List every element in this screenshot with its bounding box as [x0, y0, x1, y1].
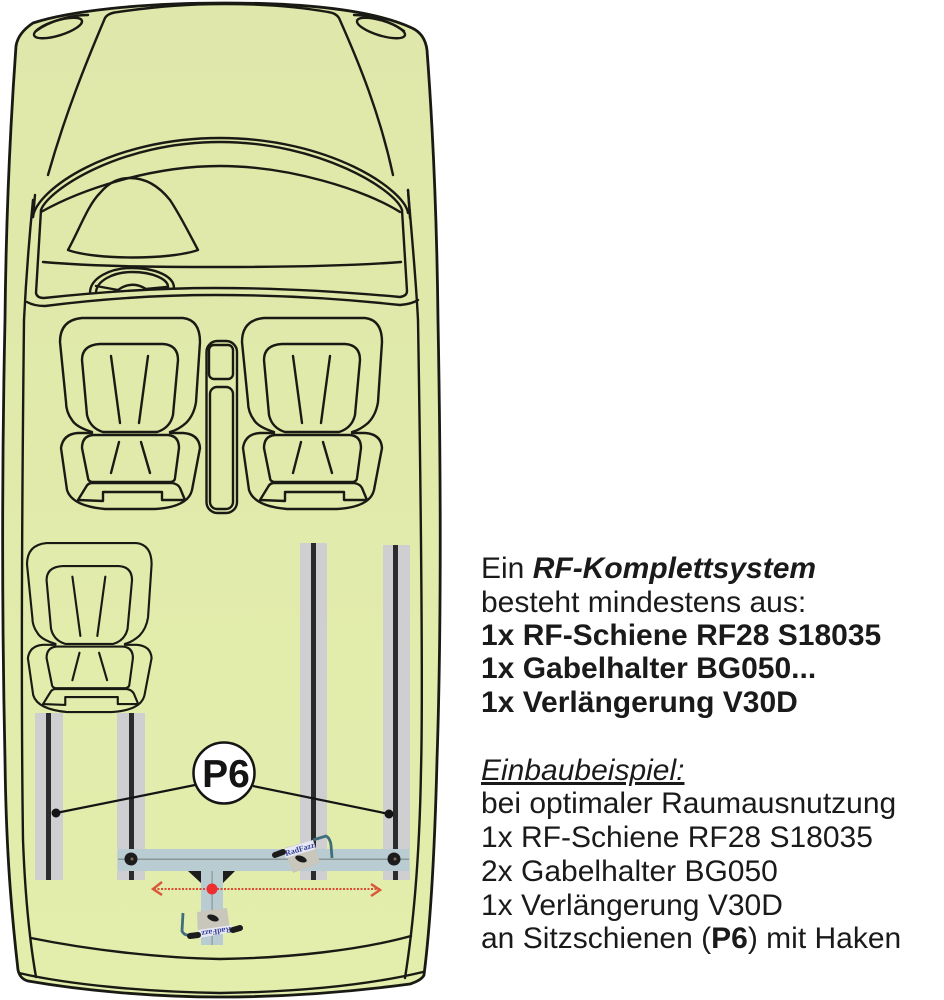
text block: installation example: 1x Verlängerung V30D — [481, 889, 783, 922]
text block: installation example: bei optimaler Raumausnutzung — [481, 787, 896, 820]
fork holder on extension — [182, 908, 240, 938]
text block: system contents — [481, 552, 881, 719]
center console — [206, 341, 237, 513]
text block: system contents: Ein RF-Komplettsystem — [481, 552, 816, 585]
RF rail crossbar and extension — [118, 849, 409, 945]
inner body lines — [24, 200, 33, 320]
windshield and dashboard — [27, 138, 418, 306]
front left seat — [60, 318, 200, 509]
movement arrow — [153, 882, 380, 896]
seat rails — [35, 543, 410, 880]
P6 callout — [52, 742, 394, 818]
hood and headlights — [32, 4, 407, 175]
text block: installation example: 1x RF-Schiene RF28 S18035 — [481, 821, 873, 854]
text block: installation example: 2x Gabelhalter BG050 — [481, 855, 778, 888]
icon: right headlight — [355, 14, 407, 42]
icon: left knob — [124, 852, 138, 866]
rear seat — [27, 543, 152, 712]
icon: left headlight — [32, 14, 84, 42]
text block: system contents: 1x Verlängerung V30D — [481, 686, 798, 719]
icon: instrument binnacle — [68, 178, 198, 258]
front right seat — [242, 318, 382, 509]
fork holder on crossbar — [275, 836, 332, 873]
icon: right knob — [388, 852, 400, 866]
text block: system contents: besteht mindestens aus: — [481, 586, 806, 619]
fork holder on extension: RadFazz — [200, 925, 232, 938]
text block: installation example: Einbaubeispiel: — [481, 754, 684, 787]
fork holder on crossbar: RadFazz — [284, 840, 316, 858]
car body outline — [3, 3, 440, 997]
P6 callout: P6 — [202, 753, 250, 796]
text block: system contents: 1x RF-Schiene RF28 S18035 — [481, 619, 881, 652]
text block: installation example: an Sitzschienen (P6) mit Haken — [481, 922, 901, 955]
text block: installation example — [481, 754, 901, 955]
red pivot dot — [206, 884, 218, 894]
icon: steering wheel — [90, 268, 174, 293]
text block: system contents: 1x Gabelhalter BG050... — [481, 652, 816, 685]
